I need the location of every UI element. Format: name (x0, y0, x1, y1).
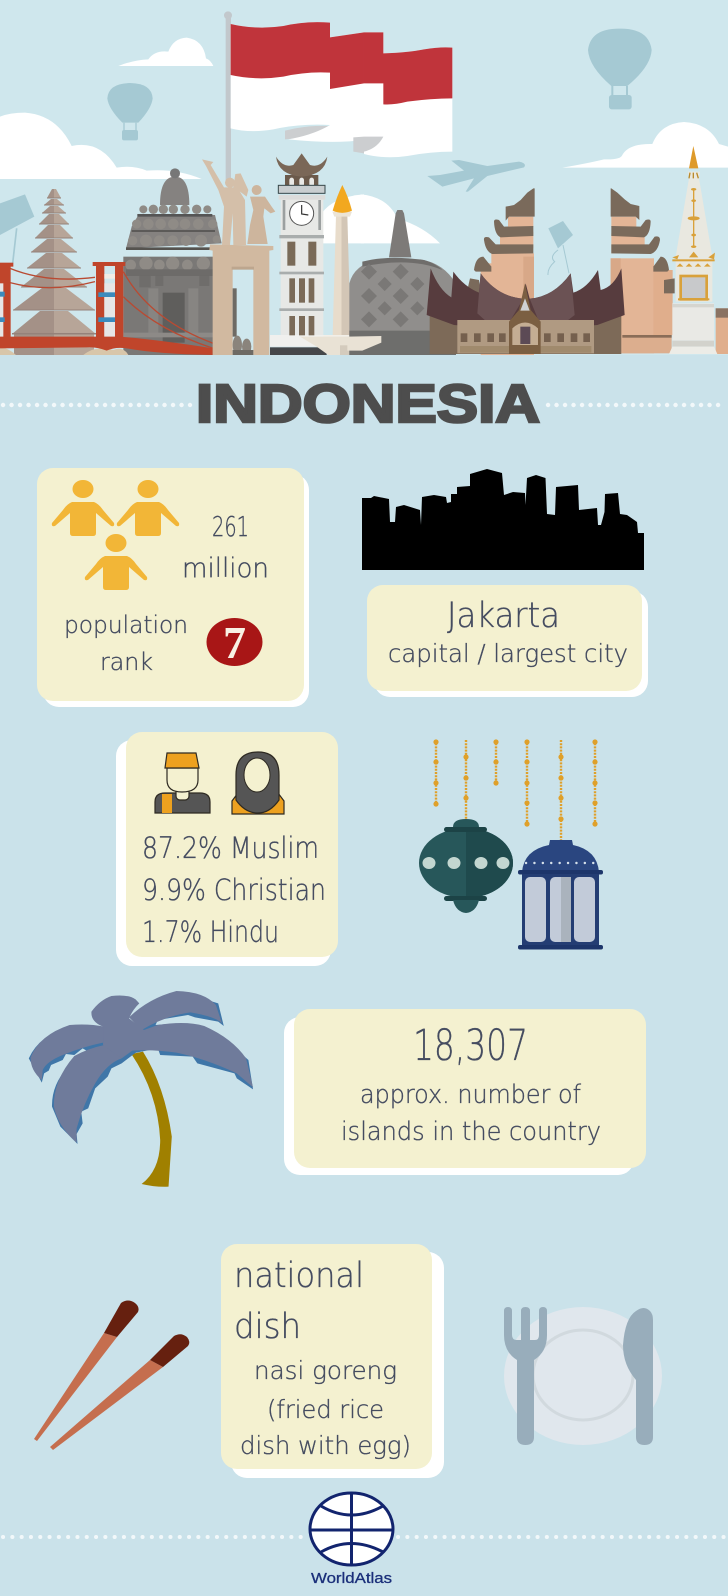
icon: chopsticks (34, 1300, 189, 1450)
dish description: (fried rice (267, 1395, 384, 1424)
gate: right tower (611, 188, 675, 353)
flag: first segment (231, 22, 330, 139)
flag: third segment (364, 32, 452, 157)
icon: hanging lanterns (419, 739, 603, 950)
dish heading: national (234, 1256, 364, 1296)
population rank label (64, 611, 188, 676)
panel: islands (284, 1009, 646, 1175)
religion percentages: 1.7% Hindu (142, 915, 279, 949)
dish heading: dish (234, 1307, 301, 1347)
icon: knife (623, 1308, 653, 1445)
population figure: 261 (212, 510, 249, 543)
panel: religion (116, 732, 338, 966)
religion percentages (142, 831, 326, 949)
pagoda (12, 189, 96, 355)
kite: right (548, 221, 573, 275)
dotted divider: top (3, 403, 726, 407)
flagpole (224, 11, 232, 182)
lantern: green (419, 819, 513, 913)
icon: fork (504, 1307, 547, 1445)
Tugu monument (669, 146, 728, 354)
rank badge (206, 617, 262, 668)
temple: Prambanan (123, 168, 222, 355)
capital name: Jakarta (447, 596, 560, 636)
icon: city skyline silhouette (362, 469, 644, 570)
dish description: dish with egg) (240, 1431, 411, 1460)
capital caption: capital / largest city (388, 639, 628, 668)
icon: globe (310, 1493, 393, 1565)
figure: woman (247, 185, 275, 244)
dish description (240, 1356, 411, 1460)
icon: palm tree (29, 991, 253, 1187)
islands caption (341, 1080, 601, 1147)
balloon: small (107, 83, 153, 140)
population rank label: population (64, 611, 188, 639)
gate: left tower (467, 188, 535, 355)
panel: capital (367, 585, 648, 697)
cloud: top middle (118, 38, 213, 66)
number of islands: 18,307 (413, 1021, 528, 1071)
logo: WorldAtlas (310, 1493, 393, 1587)
islands caption: islands in the country (341, 1117, 601, 1147)
dish description: nasi goreng (254, 1356, 397, 1385)
balloon: large (588, 29, 652, 109)
icon: people (52, 480, 179, 590)
logo wordmark: WorldAtlas (311, 1570, 392, 1587)
islands caption: approx. number of (360, 1080, 582, 1110)
icon: plate with fork and knife (504, 1307, 662, 1445)
panel: national dish (221, 1244, 444, 1478)
religion percentages: 87.2% Muslim (142, 831, 319, 865)
population rank label: rank (100, 648, 153, 676)
panel: population (37, 468, 309, 707)
lantern: blue (518, 840, 603, 950)
kite: left (0, 194, 34, 263)
icon: man with cap (155, 753, 210, 813)
flag: second segment (288, 32, 364, 153)
stupa: Borobudur (347, 210, 456, 355)
Monas monument (300, 185, 364, 355)
cloud: behind stupa (361, 194, 440, 243)
statue monument (202, 159, 275, 355)
dotted divider: bottom (3, 1535, 726, 1539)
figure: man with raised arm (202, 159, 248, 245)
cloud: behind monument (322, 194, 364, 243)
clock tower (270, 153, 333, 355)
religion percentages: 9.9% Christian (142, 873, 326, 907)
title: INDONESIA: INDONESIA (196, 374, 540, 434)
icon: woman with hijab (232, 752, 284, 814)
banner: Indonesian landmarks skyline (0, 0, 728, 355)
bridge: red suspension (0, 262, 213, 355)
population unit: million (182, 553, 269, 584)
cloud: right (562, 122, 728, 168)
plane (427, 160, 525, 192)
rank badge: 7 (223, 617, 246, 668)
Minangkabau house (427, 268, 625, 354)
cloud: left (0, 113, 202, 179)
dish heading (234, 1256, 364, 1347)
